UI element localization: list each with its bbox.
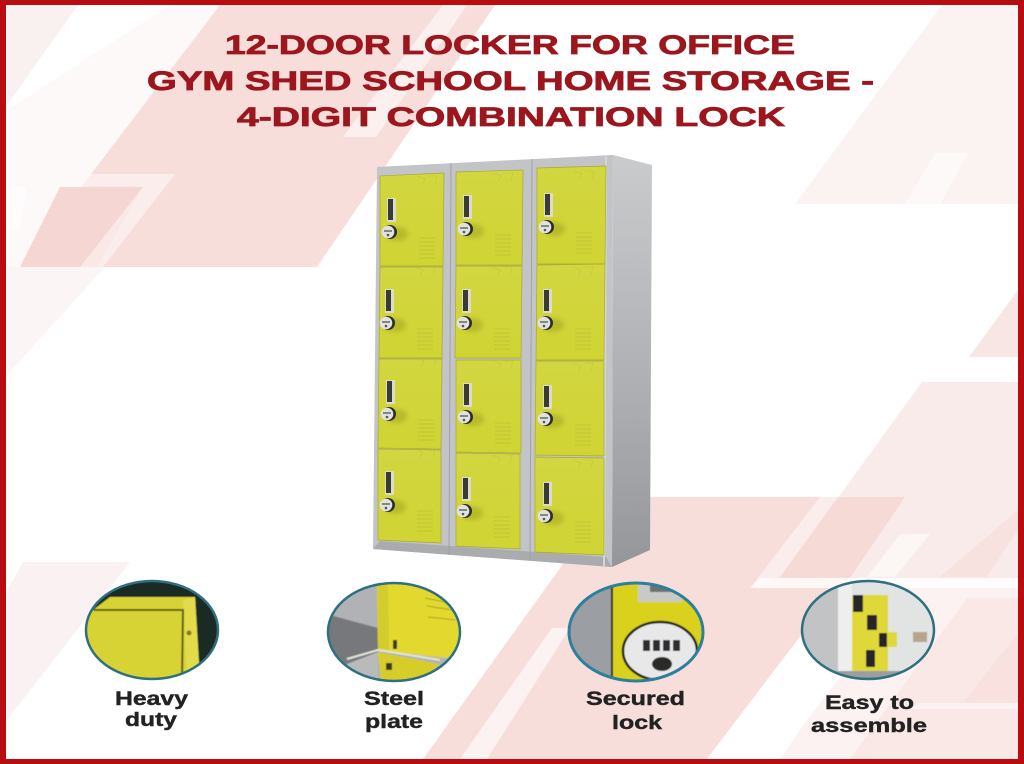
door column 1 bbox=[378, 173, 444, 543]
feature: easy to assemble bbox=[800, 580, 936, 737]
cabinet front frame bbox=[373, 155, 613, 567]
photo: door corner bbox=[87, 582, 217, 678]
cabinet side panel bbox=[612, 155, 652, 567]
door column 2 bbox=[455, 170, 523, 549]
label: Heavy bbox=[115, 689, 189, 710]
title: 12-DOOR LOCKER FOR OFFICE bbox=[225, 30, 795, 60]
label: duty bbox=[125, 710, 178, 731]
label: plate bbox=[365, 712, 423, 733]
label: lock bbox=[612, 713, 663, 734]
feature: steel plate bbox=[326, 582, 462, 733]
title: 4-DIGIT COMBINATION LOCK bbox=[237, 102, 786, 132]
photo: combination lock bbox=[568, 582, 705, 682]
photo: assembled lockers bbox=[800, 580, 936, 681]
label bbox=[115, 689, 189, 731]
door column 3 bbox=[535, 166, 606, 555]
feature: secured lock bbox=[568, 582, 705, 734]
locker cabinet bbox=[373, 155, 652, 567]
label: Easy to bbox=[825, 693, 914, 714]
feature: heavy duty bbox=[80, 580, 220, 731]
label: Steel bbox=[364, 689, 424, 710]
title bbox=[147, 30, 874, 132]
photo: open door bbox=[326, 582, 462, 682]
label bbox=[811, 693, 927, 737]
label: Secured bbox=[586, 689, 685, 710]
label bbox=[586, 689, 685, 734]
label: assemble bbox=[811, 716, 927, 737]
label bbox=[364, 689, 424, 733]
title: GYM SHED SCHOOL HOME STORAGE - bbox=[147, 66, 874, 96]
